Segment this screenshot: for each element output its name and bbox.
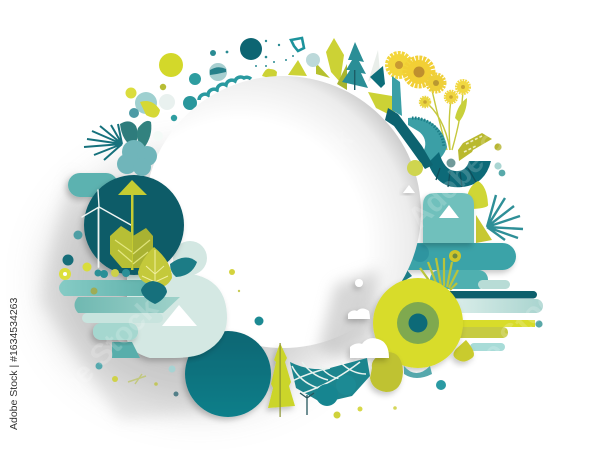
teal second pill — [430, 270, 488, 289]
pale blob — [306, 53, 320, 67]
white cloud small — [348, 308, 370, 319]
watermark: Adobe Stock — [422, 272, 575, 425]
small white triangle — [403, 185, 415, 193]
yellow patch behind palm — [476, 215, 492, 243]
band three — [82, 313, 163, 323]
left leaf hexagon — [110, 226, 132, 268]
white triangle in arch — [162, 305, 197, 326]
dark triangle — [370, 66, 385, 88]
vertical stock credit: Adobe Stock | #1634534263 — [8, 298, 20, 430]
centre teal dot — [408, 314, 428, 332]
band two — [74, 297, 180, 313]
small yellow disc by circle — [407, 160, 423, 176]
sunflower tiny — [420, 97, 430, 107]
yellow circle badge — [159, 53, 183, 77]
right cluster back layer — [388, 54, 543, 390]
dark strip on circle edge — [385, 108, 433, 169]
teal segmented arc — [408, 118, 447, 165]
small dots on left — [74, 230, 82, 240]
teal dots — [189, 73, 201, 85]
big teal circle bottom — [185, 331, 271, 417]
small dark tree — [300, 393, 314, 415]
small teal shrub — [94, 269, 130, 278]
watermark — [12, 82, 575, 445]
globe net band — [290, 358, 370, 415]
sunflower small — [428, 74, 444, 92]
small dots right — [446, 143, 505, 176]
grey shade behind clouds — [318, 270, 378, 358]
flower leaves — [455, 98, 467, 122]
teal big pill — [396, 243, 516, 270]
clouds — [348, 279, 389, 358]
teal wave — [199, 77, 251, 100]
watermark: Adobe Stock — [207, 122, 360, 275]
white ball — [355, 279, 363, 287]
band one — [59, 280, 147, 296]
yellow tree — [268, 343, 295, 417]
teal disc right — [336, 375, 356, 395]
sunflower lower — [445, 91, 457, 103]
inner green ring — [397, 302, 439, 344]
teal flower — [117, 140, 157, 176]
pale bubble — [173, 241, 207, 275]
bottom yellow fruit — [370, 352, 403, 392]
dark teal circle — [240, 38, 262, 60]
central white circle — [145, 76, 421, 348]
right leaf hexagon — [133, 228, 153, 268]
watermark: Adobe Stock — [402, 82, 555, 235]
top arc decorations — [126, 38, 402, 121]
sunflower large centre — [406, 59, 432, 85]
yellow bell — [464, 181, 488, 209]
flower stems — [423, 72, 463, 150]
foliage on bands — [59, 230, 197, 304]
teal disc left — [316, 384, 338, 406]
yellow small dots — [160, 84, 166, 90]
wind turbine — [82, 190, 131, 267]
band four — [93, 323, 138, 340]
dark crescent fan — [428, 152, 491, 187]
teal leaf right — [170, 257, 197, 277]
dark teal bud — [141, 281, 167, 304]
pale disc with yellow — [129, 92, 160, 118]
left dark circle with turbine and arrow — [82, 175, 184, 275]
teal slab — [112, 342, 140, 358]
large yellow circle with target — [373, 278, 463, 368]
pale bar — [445, 299, 543, 313]
right palm — [487, 195, 523, 240]
yellow bits — [368, 92, 396, 118]
small sunflower on pill — [449, 250, 461, 262]
yellow triangle shapes — [262, 38, 347, 90]
pale aqua bar — [470, 343, 505, 351]
soft drop shadow of the ring — [40, 155, 350, 420]
pale disc — [159, 94, 175, 110]
yellow leaf — [138, 247, 172, 287]
olive ship — [458, 133, 492, 161]
teal squiggle — [291, 38, 304, 51]
dark leaves — [120, 121, 138, 147]
left cluster back pill — [68, 173, 118, 197]
growth arrow — [118, 180, 147, 270]
sunflower large left — [388, 54, 410, 76]
scattered specks bottom left — [96, 269, 397, 418]
stripe disc — [209, 63, 227, 81]
sunflower far right — [456, 80, 470, 94]
white tent panel — [368, 50, 380, 82]
small dots — [210, 40, 313, 67]
right house panel — [423, 193, 474, 243]
small teal piece under yellow circle — [404, 366, 432, 378]
blue dot on bar — [535, 320, 543, 328]
white cloud large — [350, 338, 389, 358]
white triangle in house — [439, 205, 459, 218]
yellow bar — [450, 320, 535, 327]
left lower stack — [59, 241, 227, 358]
fern fan — [420, 258, 458, 290]
olive bar — [450, 327, 508, 338]
watermark: Adobe Stock — [12, 292, 165, 445]
pale arch — [127, 273, 227, 358]
small dots lower right — [436, 380, 446, 390]
palm and flower top left — [84, 121, 163, 176]
teal pine tree — [342, 42, 368, 90]
palm leaf — [84, 124, 122, 160]
dark teal bar — [440, 291, 537, 298]
teal leaves cluster — [388, 235, 429, 286]
pale pill — [478, 280, 510, 289]
yellow pear — [453, 340, 474, 362]
artwork — [59, 38, 543, 418]
